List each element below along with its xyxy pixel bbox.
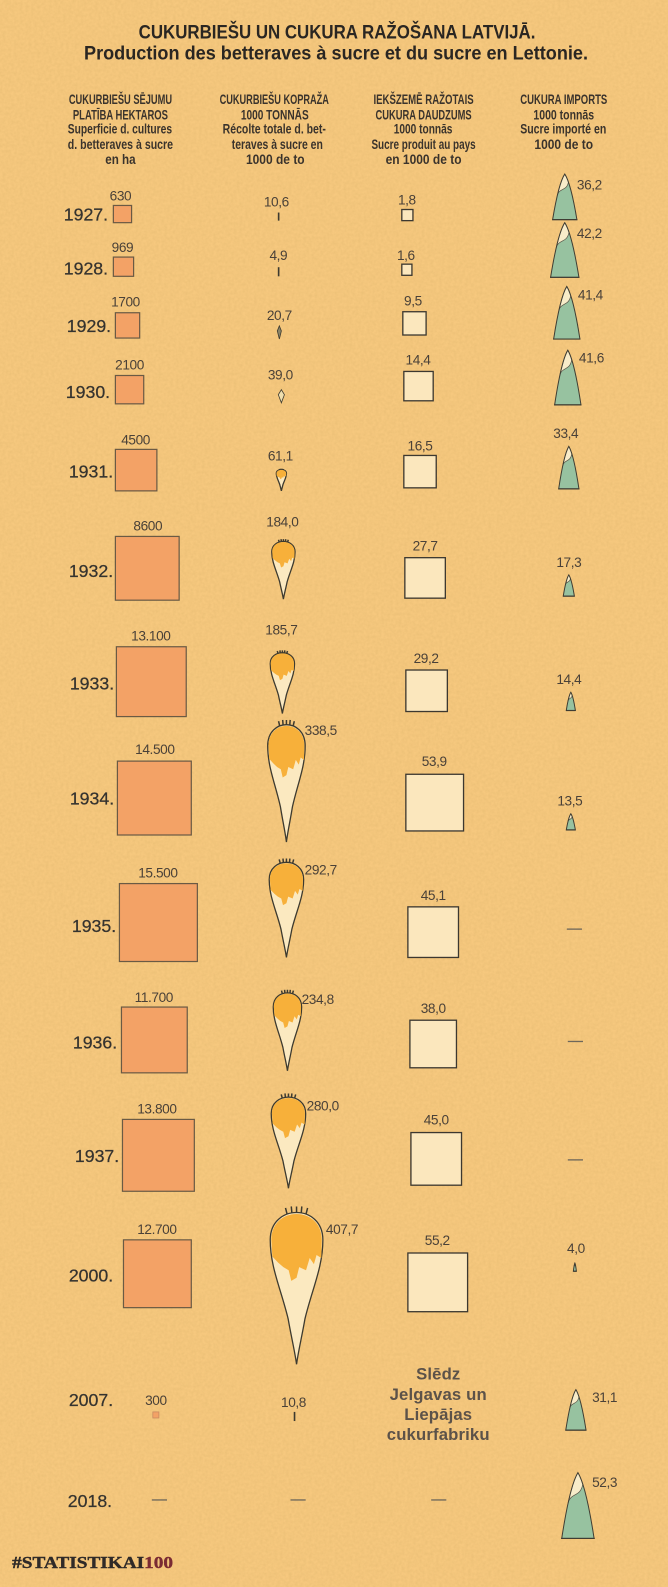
column heading: sugar imports: CUKURA IMPORTS (520, 92, 607, 107)
column heading: sown area: en ha (105, 152, 136, 167)
note: factories closed: Slēdz (416, 1365, 460, 1384)
column: sown area squares: 630 (110, 188, 132, 203)
column: sugar imports cones: 36,2 (577, 177, 602, 192)
column: beet harvest icons: 10,6 (264, 194, 289, 209)
column: domestic sugar squares: 55,2 (425, 1233, 450, 1248)
column: beet harvest icons: 39,0 (268, 368, 294, 383)
column: beet harvest icons: 234,8 (302, 992, 334, 1007)
column: sown area squares: 1700 (111, 295, 141, 310)
column: sugar imports cones: 41,6 (579, 350, 604, 365)
column: sugar imports cones: 52,3 (592, 1475, 617, 1490)
column: beet harvest icons: 338,5 (305, 723, 338, 738)
column: sown area squares: 300 (145, 1393, 167, 1408)
year labels: 1930. (66, 382, 110, 402)
column: beet harvest icons: 10,8 (281, 1395, 306, 1410)
column: domestic sugar squares: 27,7 (413, 539, 438, 554)
column: domestic sugar squares: 45,1 (421, 888, 446, 903)
year labels: 1927. (64, 205, 108, 225)
column: beet harvest icons: 292,7 (305, 862, 337, 877)
column heading: beet harvest: 1000 TONNĀS (241, 107, 309, 122)
year labels: 2018. (68, 1491, 112, 1511)
year labels: 1937. (75, 1146, 119, 1166)
column: sown area squares: 4500 (121, 432, 151, 447)
column: sown area squares (110, 188, 197, 1500)
column: sown area squares: 15.500 (138, 866, 178, 881)
column: beet harvest icons: 185,7 (265, 623, 297, 638)
column: sown area squares: 969 (112, 240, 133, 255)
column: sugar imports cones: 14,4 (556, 672, 582, 687)
year labels: 1936. (73, 1033, 117, 1053)
column: beet harvest icons: 407,7 (326, 1222, 358, 1237)
column heading: domestic sugar (371, 92, 476, 167)
column heading: sown area: Superficie d. cultures (68, 122, 172, 137)
note: factories closed: Liepājas (404, 1405, 472, 1424)
column heading: sown area: d. betteraves à sucre (68, 137, 173, 152)
column heading: sugar imports: 1000 de to (534, 137, 593, 152)
note: factories closed: cukurfabriku (387, 1425, 490, 1444)
column: domestic sugar squares: 9,5 (404, 294, 423, 309)
column: sugar imports cones: 31,1 (592, 1390, 617, 1405)
column heading: domestic sugar: CUKURA DAUDZUMS (375, 107, 472, 122)
column heading: beet harvest: CUKURBIEŠU KOPRAŽA (220, 92, 329, 107)
column: domestic sugar squares: 14,4 (406, 352, 431, 367)
column: sugar imports cones: 41,4 (578, 288, 604, 303)
column: domestic sugar squares: 38,0 (421, 1001, 446, 1016)
column: domestic sugar squares (397, 192, 468, 1500)
title (84, 21, 588, 65)
year labels (64, 205, 119, 1511)
year labels: 2007. (69, 1390, 113, 1410)
year labels: 1935. (72, 916, 116, 936)
column: beet harvest icons: 61,1 (268, 449, 293, 464)
column: beet harvest icons: 20,7 (267, 308, 292, 323)
column: domestic sugar squares: 16,5 (408, 438, 433, 453)
column: domestic sugar squares: 29,2 (414, 651, 439, 666)
year labels: 1928. (64, 258, 108, 278)
column: sugar imports cones: 17,3 (556, 555, 581, 570)
year labels: 1931. (69, 462, 113, 482)
column heading: beet harvest (220, 92, 329, 167)
column heading: beet harvest: teraves à sucre en (232, 137, 323, 152)
column heading: beet harvest: 1000 de to (246, 152, 305, 167)
column: sown area squares: 2100 (115, 357, 145, 372)
year labels: 2000. (69, 1265, 113, 1285)
note: factories closed (387, 1365, 490, 1444)
column heading: sown area (68, 92, 173, 167)
column: sugar imports cones: 4,0 (567, 1241, 586, 1256)
column heading: domestic sugar: IEKŠZEMĒ RAŽOTAIS (373, 92, 474, 107)
column heading: domestic sugar: 1000 tonnās (394, 122, 453, 137)
column heading: sugar imports (520, 92, 607, 152)
logo: hashtag: #STATISTIKAI 100 (12, 1553, 173, 1572)
note: factories closed: Jelgavas un (390, 1385, 487, 1404)
column heading: beet harvest: Récolte totale d. bet- (223, 122, 326, 137)
column: domestic sugar squares: 53,9 (422, 754, 447, 769)
column heading: domestic sugar: Sucre produit au pays (371, 137, 476, 152)
title: Production des betteraves à sucre et du sucre en Lettonie. (84, 44, 588, 65)
column heading: domestic sugar: en 1000 de to (386, 152, 462, 167)
column: beet harvest icons: 280,0 (307, 1098, 340, 1113)
year labels: 1934. (70, 789, 114, 809)
column: sown area squares: 12.700 (137, 1222, 177, 1237)
column: sown area squares: 13.800 (137, 1101, 177, 1116)
column heading: sugar imports: 1000 tonnās (533, 107, 594, 122)
year labels: 1932. (69, 561, 113, 581)
column: domestic sugar squares: 1,8 (398, 192, 416, 207)
column: sugar imports cones: 13,5 (557, 794, 583, 809)
column: beet harvest icons: 184,0 (266, 514, 299, 529)
year labels: 1933. (70, 673, 114, 693)
column: sugar imports cones: 33,4 (553, 426, 579, 441)
column: sown area squares: 13.100 (131, 629, 171, 644)
column: beet harvest icons: 4,9 (269, 248, 287, 263)
title: CUKURBIEŠU UN CUKURA RAŽOŠANA LATVIJĀ. (139, 21, 535, 43)
column heading: sugar imports: Sucre importé en (520, 122, 606, 137)
column: sown area squares: 11.700 (135, 990, 174, 1005)
column: domestic sugar squares: 45,0 (424, 1112, 450, 1127)
column: sown area squares: 14.500 (135, 742, 175, 757)
column: sown area squares: 8600 (133, 518, 163, 533)
column heading: sown area: CUKURBIEŠU SĒJUMU (69, 92, 172, 107)
column heading: sown area: PLATĪBA HEKTAROS (73, 107, 168, 122)
column: beet harvest icons (264, 194, 358, 1500)
column: sugar imports cones: 42,2 (577, 226, 602, 241)
year labels: 1929. (67, 316, 111, 336)
column: sugar imports cones (550, 174, 617, 1538)
column: domestic sugar squares: 1,6 (397, 248, 415, 263)
